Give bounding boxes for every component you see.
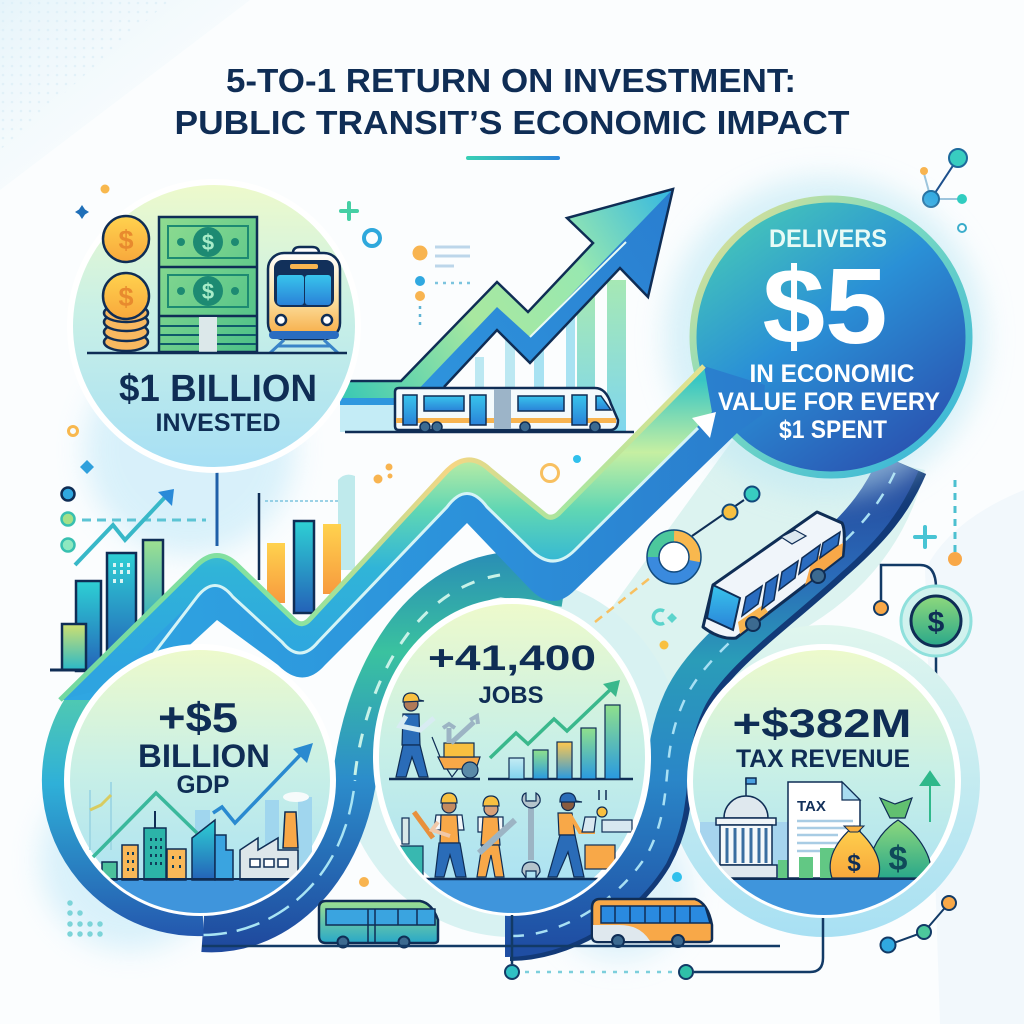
text: +$5: +$5: [158, 694, 238, 741]
rising arrow: [340, 189, 673, 432]
legend markers near rising arrow: [412, 246, 472, 328]
jobs illustration: [389, 680, 633, 913]
text: GDP: GDP: [176, 771, 230, 799]
halo: tax circle: [668, 625, 980, 937]
title accent line: [466, 156, 560, 160]
small accents: [70, 455, 682, 934]
halo: jobs circle: [340, 577, 684, 937]
tax illustration: [700, 770, 941, 915]
text: delivers $5 callout: $5: [762, 245, 888, 366]
road: s-curve toward delivers circle: [505, 463, 905, 938]
title: [174, 62, 850, 141]
network nodes top right: [920, 149, 967, 232]
white arrow tip: [692, 412, 716, 438]
road: curving around GDP circle: [203, 575, 565, 935]
icon: large bus on road: [703, 512, 844, 638]
bottom right nodes: [880, 896, 956, 952]
text: tax revenue: TAX REVENUE: [736, 745, 910, 773]
bar chart center left: [259, 475, 355, 613]
text: delivers $5 callout: [718, 225, 940, 444]
decorative markers upper left: [68, 184, 380, 436]
panel: jobs: [370, 601, 660, 919]
capitol building: [713, 778, 777, 878]
text: delivers $5 callout: $1 SPENT: [779, 416, 887, 444]
text: +41,400: +41,400: [428, 639, 596, 678]
connector node dots right: [874, 527, 962, 615]
panel: tax revenue: [690, 647, 960, 919]
connector lines from circle nodes: [217, 470, 955, 706]
tax document: [788, 782, 860, 878]
panel: delivers circle background: [665, 177, 985, 497]
rising zigzag band: [60, 366, 765, 700]
icon: green bus: [319, 901, 438, 948]
icon: orange coach: [592, 899, 712, 947]
money bags: [869, 820, 931, 878]
text: delivers $5 callout: DELIVERS: [769, 225, 887, 253]
tax illustration: $: [847, 850, 861, 877]
text: delivers $5 callout: VALUE FOR EVERY: [718, 388, 940, 416]
icon: dollar badge: [901, 586, 971, 656]
icon: banknote stack: $: [202, 230, 214, 255]
icon: coins: [103, 216, 149, 351]
title: PUBLIC TRANSIT’S ECONOMIC IMPACT: [174, 104, 850, 141]
icon: articulated tram: [395, 388, 618, 432]
title: 5-TO-1 RETURN ON INVESTMENT:: [226, 62, 796, 99]
panel: $1 billion invested: [70, 182, 358, 470]
bar chart left with arrow: [50, 460, 206, 671]
icon: train front: [268, 247, 340, 353]
upper rising chart bars: [475, 280, 626, 432]
icon: dollar badge: $: [928, 606, 945, 639]
text: delivers $5 callout: IN ECONOMIC: [750, 360, 914, 388]
icon: banknote stack: [159, 217, 257, 352]
text: $1 billion: $1 BILLION: [119, 368, 317, 410]
icon: banknote stack: $: [202, 279, 214, 304]
text: jobs: JOBS: [478, 682, 544, 709]
group of workers: [400, 790, 632, 879]
ring around GDP circle: [58, 680, 203, 920]
text: invested: INVESTED: [156, 409, 280, 437]
worker with cart: [396, 693, 480, 778]
ground line and bottom connectors: [202, 915, 823, 979]
panel: GDP: [60, 647, 340, 919]
GDP skyline illustration: [89, 743, 313, 913]
growth arrow: [921, 772, 939, 822]
icon: coins: $: [118, 225, 134, 255]
text: +$382M: +$382M: [732, 702, 912, 746]
icon: coins: $: [118, 282, 134, 312]
tax illustration: TAX: [797, 798, 826, 815]
text: billion: BILLION: [138, 738, 270, 774]
tax illustration: $: [889, 840, 908, 878]
icon: donut chart with nodes: [595, 486, 760, 622]
